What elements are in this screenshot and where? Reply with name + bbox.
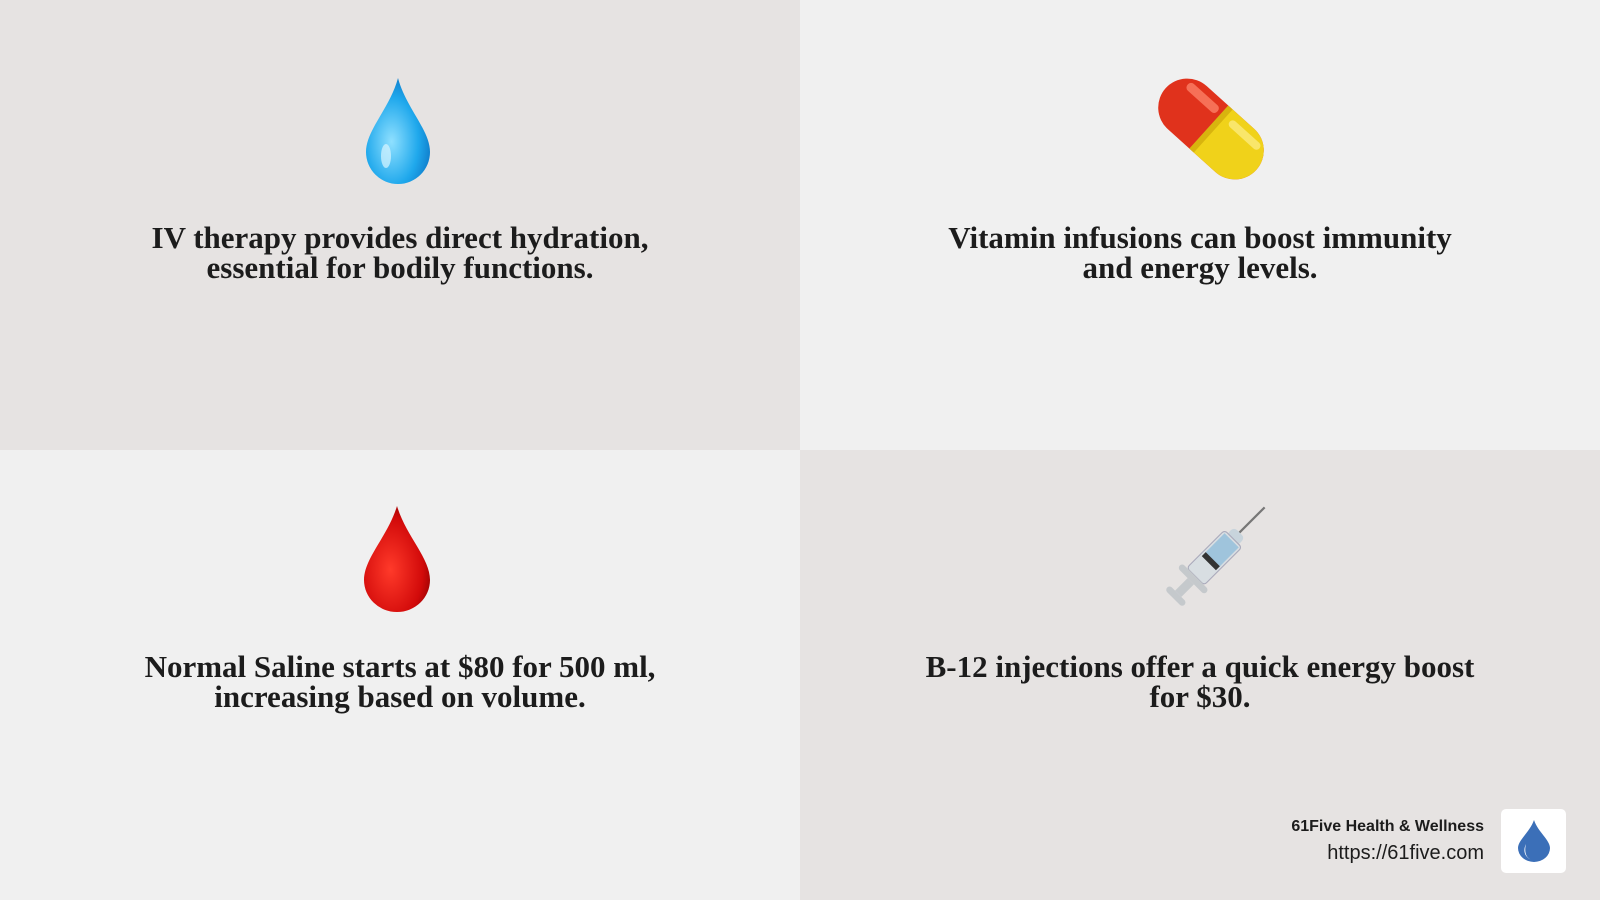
text: b12: for $30. [1149,679,1251,714]
text: hydration: IV therapy provides direct hydration, [152,220,648,255]
text: vitamins: and energy levels. [1082,250,1318,285]
text: vitamins: Vitamin infusions can boost immunity [948,220,1452,255]
brand text: 61Five Health & Wellness [1291,818,1484,835]
text: hydration: essential for bodily functions. [206,250,593,285]
text: saline: Normal Saline starts at $80 for 500 ml, [145,649,655,684]
panel: saline [0,450,800,900]
logo: drop [1501,809,1566,873]
text: hydration [152,220,648,285]
icon: water drop [366,78,430,184]
panel: hydration [0,0,800,450]
text: saline: increasing based on volume. [214,679,586,714]
icon: syringe [1166,506,1266,606]
text: b12: B-12 injections offer a quick energy boost [926,649,1474,684]
icon: blood drop [364,506,430,612]
brand footer [1291,809,1566,873]
panel: vitamins [800,0,1600,450]
text: saline [145,649,655,714]
brand text: https://61five.com [1327,842,1484,864]
icon: pill [1158,78,1264,180]
panel: b12 [800,450,1600,900]
text: b12 [926,649,1474,714]
brand text [1291,818,1484,864]
text: vitamins [948,220,1452,285]
